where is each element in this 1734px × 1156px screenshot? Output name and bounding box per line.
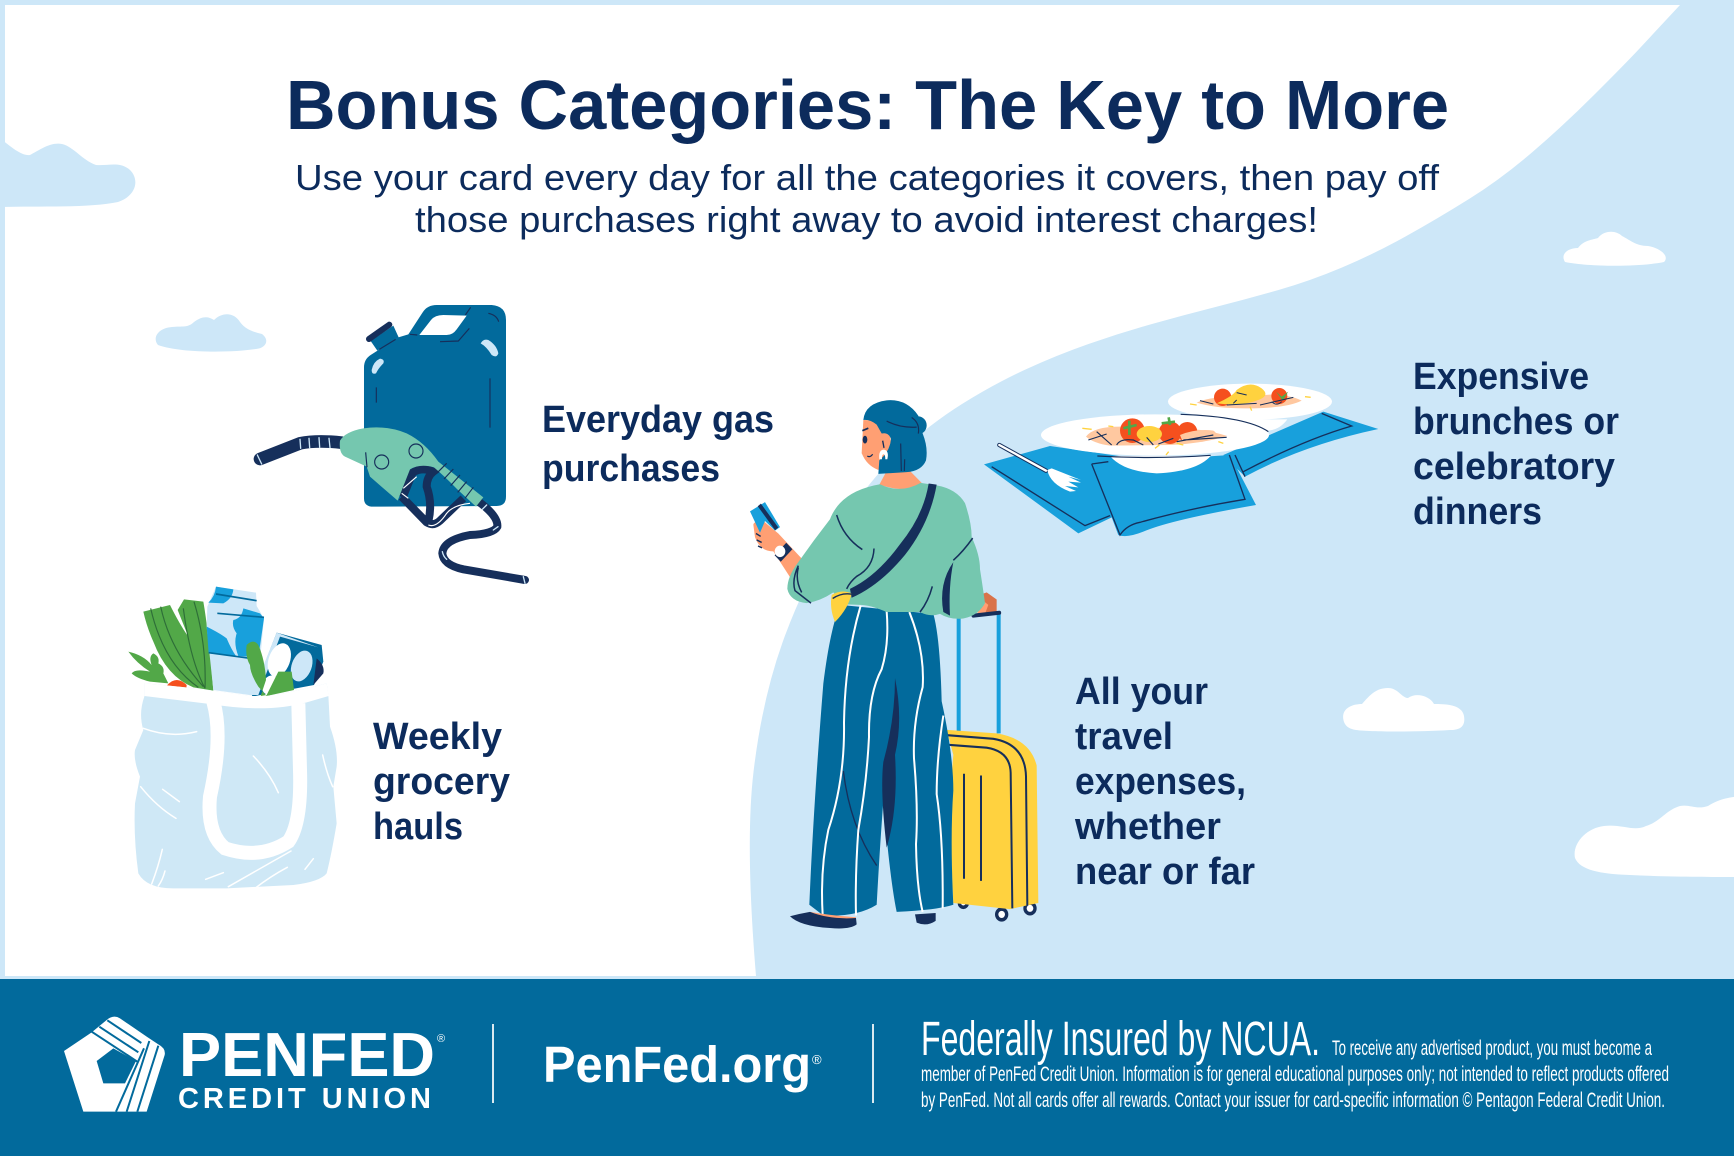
shoes (810, 912, 856, 921)
label: groceries: Weekly (373, 716, 502, 758)
divider (872, 1024, 874, 1103)
suitcase handle (959, 614, 999, 733)
milk carton (207, 587, 264, 696)
far hand (978, 592, 997, 616)
nozzle (340, 427, 483, 507)
fork (999, 445, 1046, 471)
label: travel: All your (1075, 671, 1208, 713)
small leaf and tomato (128, 652, 168, 683)
belt bag (831, 591, 852, 622)
bag rim and handle (144, 683, 329, 708)
subtitle: Use your card every day for all the categories it covers, then pay off (295, 157, 1440, 198)
label: travel: near or far (1075, 851, 1255, 893)
eye and mouth (862, 428, 868, 431)
footer band (0, 979, 1734, 1156)
icon: grocery bag (128, 587, 337, 888)
title: Bonus Categories: The Key to More (286, 66, 1449, 144)
website: PenFed.org (543, 1036, 811, 1093)
front plate (1110, 456, 1211, 473)
icon: traveler with suitcase (750, 400, 1038, 928)
back plate (1233, 419, 1287, 431)
logo: PenFed Credit Union wordmark: PENFED (179, 1021, 435, 1090)
subtitle (295, 157, 1440, 240)
face (862, 420, 892, 470)
icon: plated meals on napkins (984, 384, 1378, 536)
suitcase wheels (959, 899, 1035, 920)
ear and earring (883, 441, 884, 448)
subtitle: those purchases right away to avoid interest charges! (415, 199, 1318, 240)
label: travel: travel (1075, 716, 1173, 758)
divider (492, 1024, 494, 1103)
icon: gas can and pump nozzle (257, 305, 525, 583)
label: groceries: hauls (373, 806, 463, 848)
cloud: lower right (1575, 797, 1734, 877)
watch (778, 546, 789, 558)
neck (879, 471, 922, 489)
hose (260, 441, 342, 459)
pants (809, 605, 953, 916)
label: gas: Everyday gas (542, 399, 774, 441)
bag creases (141, 728, 333, 888)
label: dining (1413, 356, 1619, 533)
crossbody strap (850, 484, 937, 598)
cloud: upper left (156, 314, 266, 352)
logo: PenFed Credit Union wordmark: CREDIT UNION (178, 1083, 431, 1115)
label: dining: dinners (1413, 491, 1542, 533)
sweater (787, 483, 985, 619)
food box (252, 633, 323, 697)
phone card (750, 502, 780, 533)
gas can body (364, 305, 506, 507)
logo: PenFed pentagon mark (64, 1017, 165, 1112)
logo: PenFed Credit Union wordmark (178, 1021, 445, 1115)
napkins (984, 412, 1378, 533)
label: groceries: grocery (373, 761, 510, 803)
website: ® (812, 1052, 822, 1067)
greens (143, 599, 213, 691)
label: groceries (373, 716, 510, 848)
cloud: middle right (1343, 688, 1464, 732)
front leaf (246, 642, 294, 696)
trigger guard (402, 497, 463, 524)
disclosure text: Federally Insured by NCUA. (921, 1013, 1320, 1066)
label: gas: purchases (542, 448, 720, 490)
label: gas (542, 399, 774, 490)
cloud: upper right (1563, 232, 1666, 266)
forearm and hand (753, 521, 802, 577)
label: dining: Expensive (1413, 356, 1589, 398)
label: dining: celebratory (1413, 446, 1615, 488)
hair (863, 400, 927, 474)
cloud: top left (0, 138, 135, 207)
logo: PenFed Credit Union wordmark: ® (437, 1033, 445, 1045)
label: travel: whether (1074, 806, 1221, 848)
label: travel (1074, 671, 1255, 893)
label: dining: brunches or (1413, 401, 1619, 443)
bag body (135, 683, 337, 888)
disclosure text (921, 1013, 1669, 1112)
label: travel: expenses, (1075, 761, 1246, 803)
suitcase body (947, 730, 1038, 909)
